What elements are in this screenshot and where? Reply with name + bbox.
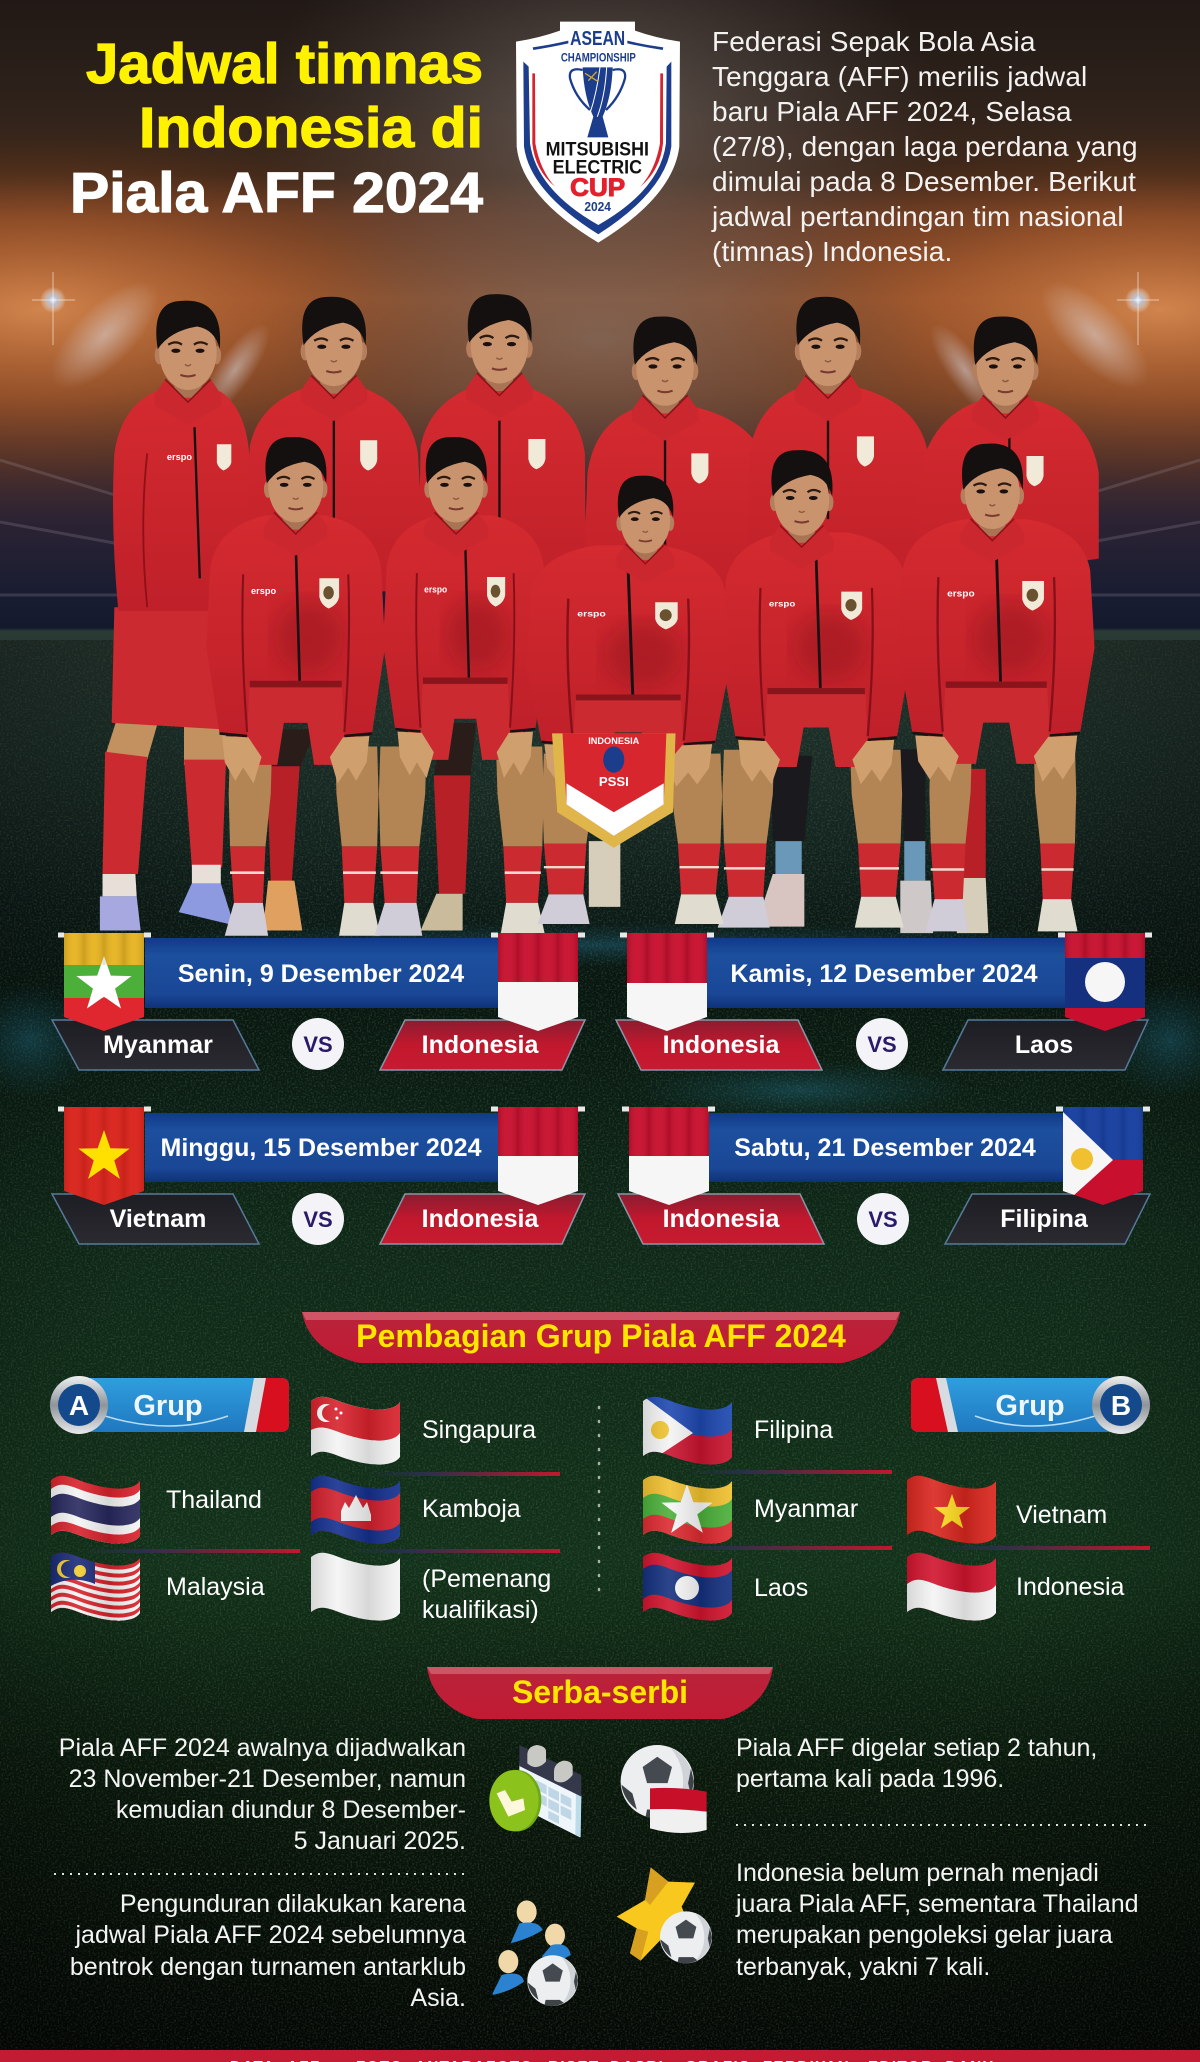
Indonesia parallelogram bbox=[380, 1020, 585, 1070]
label: Thailand: Thailand bbox=[166, 1486, 262, 1514]
intro paragraph: (27/8), dengan laga perdana yang bbox=[712, 131, 1138, 162]
match 3: Vietnam vs Indonesia: Vietnam bbox=[110, 1205, 206, 1233]
title: Indonesia di bbox=[139, 96, 483, 160]
intro paragraph: (timnas) Indonesia. bbox=[712, 236, 952, 267]
fact: digelar tiap 2 tahun bbox=[736, 1734, 1097, 1793]
label: pemenang kualifikasi: kualifikasi) bbox=[422, 1596, 539, 1624]
VS badge: VS bbox=[303, 1032, 333, 1057]
match 2: Indonesia vs Laos: VS bbox=[867, 1032, 897, 1057]
fact: gelar juara bbox=[735, 1859, 1139, 1981]
Myanmar pennant bbox=[64, 933, 144, 1031]
back row player 3 bbox=[418, 294, 586, 591]
match 1: Myanmar vs Indonesia bbox=[52, 933, 585, 1070]
title bbox=[70, 32, 483, 225]
flag: Singapura bbox=[311, 1396, 400, 1466]
back row player 2 bbox=[243, 297, 426, 591]
match 4: Indonesia vs Filipina: VS bbox=[868, 1207, 898, 1232]
back row player 5 bbox=[747, 297, 931, 591]
fact: alasan pengunduran: Asia. bbox=[410, 1984, 466, 2012]
fact: gelar juara: terbanyak, yakni 7 kali. bbox=[736, 1953, 990, 1981]
logo: ASEAN Championship Mitsubishi Electric Cup 2024: ASEAN bbox=[570, 27, 625, 50]
back row player 6 bbox=[912, 316, 1099, 591]
match 4: Indonesia vs Filipina bbox=[618, 1107, 1150, 1245]
match 4: Indonesia vs Filipina: Filipina bbox=[1000, 1205, 1089, 1233]
VS badge bbox=[292, 1018, 344, 1070]
label: pemenang kualifikasi: (Pemenang bbox=[422, 1565, 551, 1593]
intro paragraph: Federasi Sepak Bola Asia bbox=[712, 26, 1036, 57]
logo: ASEAN Championship Mitsubishi Electric Cup 2024: CUP bbox=[570, 174, 625, 202]
match 3: Vietnam vs Indonesia: Indonesia bbox=[422, 1205, 539, 1233]
match 4: Indonesia vs Filipina: Indonesia bbox=[663, 1205, 780, 1233]
match 2: Indonesia vs Laos: Kamis, 12 Desember 2024 bbox=[730, 960, 1038, 988]
intro paragraph: baru Piala AFF 2024, Selasa bbox=[712, 96, 1072, 127]
label: Laos: Laos bbox=[754, 1574, 808, 1602]
team photo: Indonesia players bbox=[100, 294, 1099, 936]
logo: ASEAN Championship Mitsubishi Electric Cup 2024 bbox=[516, 22, 680, 243]
back row player 1 bbox=[112, 301, 250, 729]
back row player 1: erspo bbox=[167, 452, 192, 462]
match 1: Myanmar vs Indonesia: Myanmar bbox=[103, 1031, 213, 1059]
logo: ASEAN Championship Mitsubishi Electric Cup 2024: ELECTRIC bbox=[553, 158, 642, 179]
front row player 1 bbox=[206, 437, 385, 936]
intro paragraph: Tenggara (AFF) merilis jadwal bbox=[712, 61, 1087, 92]
front row player 3 bbox=[526, 476, 730, 924]
group A pill: Grup bbox=[133, 1390, 203, 1422]
group B pill bbox=[911, 1376, 1150, 1434]
fact: alasan pengunduran: bentrok dengan turnamen antarklub bbox=[70, 1953, 466, 1981]
icon: calendar bbox=[489, 1745, 581, 1837]
match 3: Vietnam vs Indonesia bbox=[52, 1107, 585, 1245]
fact: digelar tiap 2 tahun: pertama kali pada 1996. bbox=[736, 1765, 1004, 1793]
flag: pemenang kualifikasi bbox=[311, 1552, 400, 1622]
group A pill: A bbox=[69, 1390, 89, 1421]
flag: Malaysia bbox=[51, 1552, 140, 1621]
back row player 4 bbox=[582, 316, 770, 605]
Myanmar parallelogram bbox=[52, 1020, 259, 1070]
logo: ASEAN Championship Mitsubishi Electric Cup 2024: MITSUBISHI bbox=[546, 139, 649, 160]
intro paragraph bbox=[711, 26, 1138, 267]
label: Malaysia: Malaysia bbox=[166, 1573, 265, 1601]
match 3: Vietnam vs Indonesia: Minggu, 15 Desember 2024 bbox=[161, 1134, 482, 1162]
label: Vietnam: Vietnam bbox=[1016, 1501, 1107, 1529]
date bar bbox=[145, 938, 501, 1008]
fact: alasan pengunduran bbox=[70, 1890, 466, 2012]
spotlights bbox=[32, 272, 1159, 345]
logo: ASEAN Championship Mitsubishi Electric Cup 2024: CHAMPIONSHIP bbox=[561, 50, 636, 64]
fact: jadwal awal: Piala AFF 2024 awalnya dijadwalkan bbox=[59, 1734, 466, 1762]
match 1: Myanmar vs Indonesia: Senin, 9 Desember 2024 bbox=[178, 960, 464, 988]
rods bbox=[58, 932, 585, 938]
icon: star and ball bbox=[617, 1867, 712, 1963]
flag: Filipina bbox=[643, 1396, 732, 1465]
group dividers bbox=[77, 1407, 1150, 1592]
fact: jadwal awal bbox=[59, 1734, 466, 1855]
footer credits bbox=[0, 2050, 1200, 2062]
flag: Myanmar bbox=[643, 1476, 732, 1544]
match 1: Myanmar vs Indonesia: Indonesia bbox=[422, 1031, 539, 1059]
heading: Serba-serbi: Serba-serbi bbox=[512, 1674, 688, 1710]
logo: ASEAN Championship Mitsubishi Electric Cup 2024: 2024 bbox=[584, 200, 611, 214]
match 3: Vietnam vs Indonesia: VS bbox=[303, 1207, 333, 1232]
title: Jadwal timnas bbox=[86, 32, 483, 96]
title: Piala AFF 2024 bbox=[70, 161, 483, 225]
match 4: Indonesia vs Filipina: Sabtu, 21 Desember 2024 bbox=[734, 1134, 1036, 1162]
fact: jadwal awal: 5 Januari 2025. bbox=[294, 1827, 466, 1855]
group B pill: Grup bbox=[995, 1390, 1065, 1422]
match 2: Indonesia vs Laos: Laos bbox=[1015, 1031, 1073, 1059]
divider dots left bbox=[54, 1873, 468, 1875]
divider dots right bbox=[736, 1824, 1152, 1826]
flag: Indonesia bbox=[907, 1552, 996, 1621]
front row player 4 bbox=[718, 450, 911, 928]
intro paragraph: jadwal pertandingan tim nasional bbox=[711, 201, 1124, 232]
fact: alasan pengunduran: jadwal Piala AFF 2024 sebelumnya bbox=[74, 1921, 466, 1949]
fact: gelar juara: merupakan pengoleksi gelar juara bbox=[736, 1921, 1113, 1949]
icon: players and ball bbox=[493, 1900, 578, 2006]
PSSI pennant: PSSI bbox=[599, 774, 629, 789]
group A pill bbox=[50, 1376, 289, 1434]
group B pill: B bbox=[1111, 1390, 1131, 1421]
front row player 5 bbox=[898, 444, 1095, 931]
fact: jadwal awal: kemudian diundur 8 Desember- bbox=[116, 1796, 466, 1824]
flag: Laos bbox=[643, 1552, 732, 1621]
PSSI pennant bbox=[552, 733, 676, 848]
PSSI pennant: INDONESIA bbox=[588, 736, 640, 746]
flag: Vietnam bbox=[907, 1475, 996, 1545]
fact: alasan pengunduran: Pengunduran dilakukan karena bbox=[120, 1890, 466, 1918]
fact: gelar juara: juara Piala AFF, sementara Thailand bbox=[735, 1890, 1139, 1918]
Indonesia pennant bbox=[498, 933, 578, 1031]
label: Kamboja: Kamboja bbox=[422, 1495, 521, 1523]
label: Filipina: Filipina bbox=[754, 1416, 833, 1444]
match 2: Indonesia vs Laos bbox=[616, 933, 1152, 1070]
front row player 2 bbox=[375, 437, 547, 936]
fact: gelar juara: Indonesia belum pernah menjadi bbox=[736, 1859, 1099, 1887]
intro paragraph: dimulai pada 8 Desember. Berikut bbox=[712, 166, 1136, 197]
back row legs bbox=[100, 723, 988, 933]
heading: Serba-serbi bbox=[427, 1667, 773, 1719]
fact: digelar tiap 2 tahun: Piala AFF digelar setiap 2 tahun, bbox=[736, 1734, 1097, 1762]
label: pemenang kualifikasi bbox=[422, 1565, 551, 1624]
match 2: Indonesia vs Laos: Indonesia bbox=[663, 1031, 780, 1059]
icon: ball with Indonesian flag bbox=[621, 1745, 707, 1833]
fact: jadwal awal: 23 November-21 Desember, namun bbox=[69, 1765, 466, 1793]
heading: Pembagian Grup Piala AFF 2024: Pembagian Grup Piala AFF 2024 bbox=[356, 1318, 846, 1354]
heading: Pembagian Grup Piala AFF 2024 bbox=[302, 1312, 900, 1363]
label: Singapura: Singapura bbox=[422, 1416, 536, 1444]
flag: Thailand bbox=[51, 1476, 140, 1544]
flag: Kamboja bbox=[311, 1476, 400, 1544]
label: Myanmar: Myanmar bbox=[754, 1495, 858, 1523]
label: Indonesia: Indonesia bbox=[1016, 1573, 1125, 1601]
